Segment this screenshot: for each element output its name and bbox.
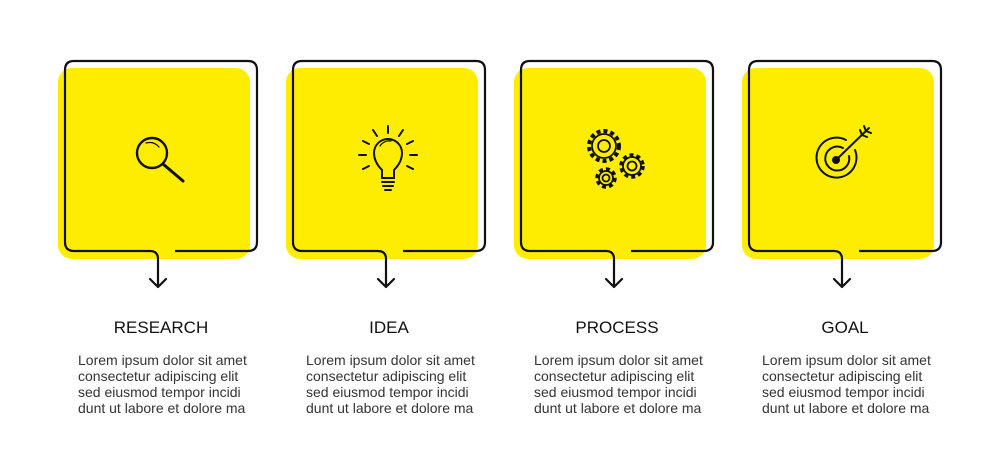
text block: process: sed eiusmod tempor incidi	[534, 384, 697, 400]
text block: research: consectetur adipiscing elit	[78, 368, 238, 384]
text block: idea: consectetur adipiscing elit	[306, 368, 466, 384]
icon: magnifier	[137, 138, 183, 181]
heading: research: RESEARCH	[114, 318, 208, 337]
text block: research: Lorem ipsum dolor sit amet	[78, 352, 247, 368]
panel: process	[514, 61, 713, 416]
text block: goal: Lorem ipsum dolor sit amet	[762, 352, 931, 368]
text block: idea: sed eiusmod tempor incidi	[306, 384, 469, 400]
text block: goal: dunt ut labore et dolore ma	[762, 400, 930, 416]
panel: research	[58, 61, 257, 416]
panel: goal	[742, 61, 941, 416]
text block: goal: sed eiusmod tempor incidi	[762, 384, 925, 400]
text block: idea: Lorem ipsum dolor sit amet	[306, 352, 475, 368]
panel: idea	[286, 61, 485, 416]
text block: research: dunt ut labore et dolore ma	[78, 400, 246, 416]
text block: process: consectetur adipiscing elit	[534, 368, 694, 384]
heading: goal: GOAL	[821, 318, 869, 337]
icon: light bulb	[359, 126, 417, 190]
heading: process: PROCESS	[575, 318, 659, 337]
text block: idea: dunt ut labore et dolore ma	[306, 400, 474, 416]
icon: gears	[589, 131, 643, 187]
text block: research: sed eiusmod tempor incidi	[78, 384, 241, 400]
text block: process: Lorem ipsum dolor sit amet	[534, 352, 703, 368]
icon: target	[817, 126, 871, 178]
heading: idea: IDEA	[369, 318, 409, 337]
text block: process: dunt ut labore et dolore ma	[534, 400, 702, 416]
text block: goal: consectetur adipiscing elit	[762, 368, 922, 384]
